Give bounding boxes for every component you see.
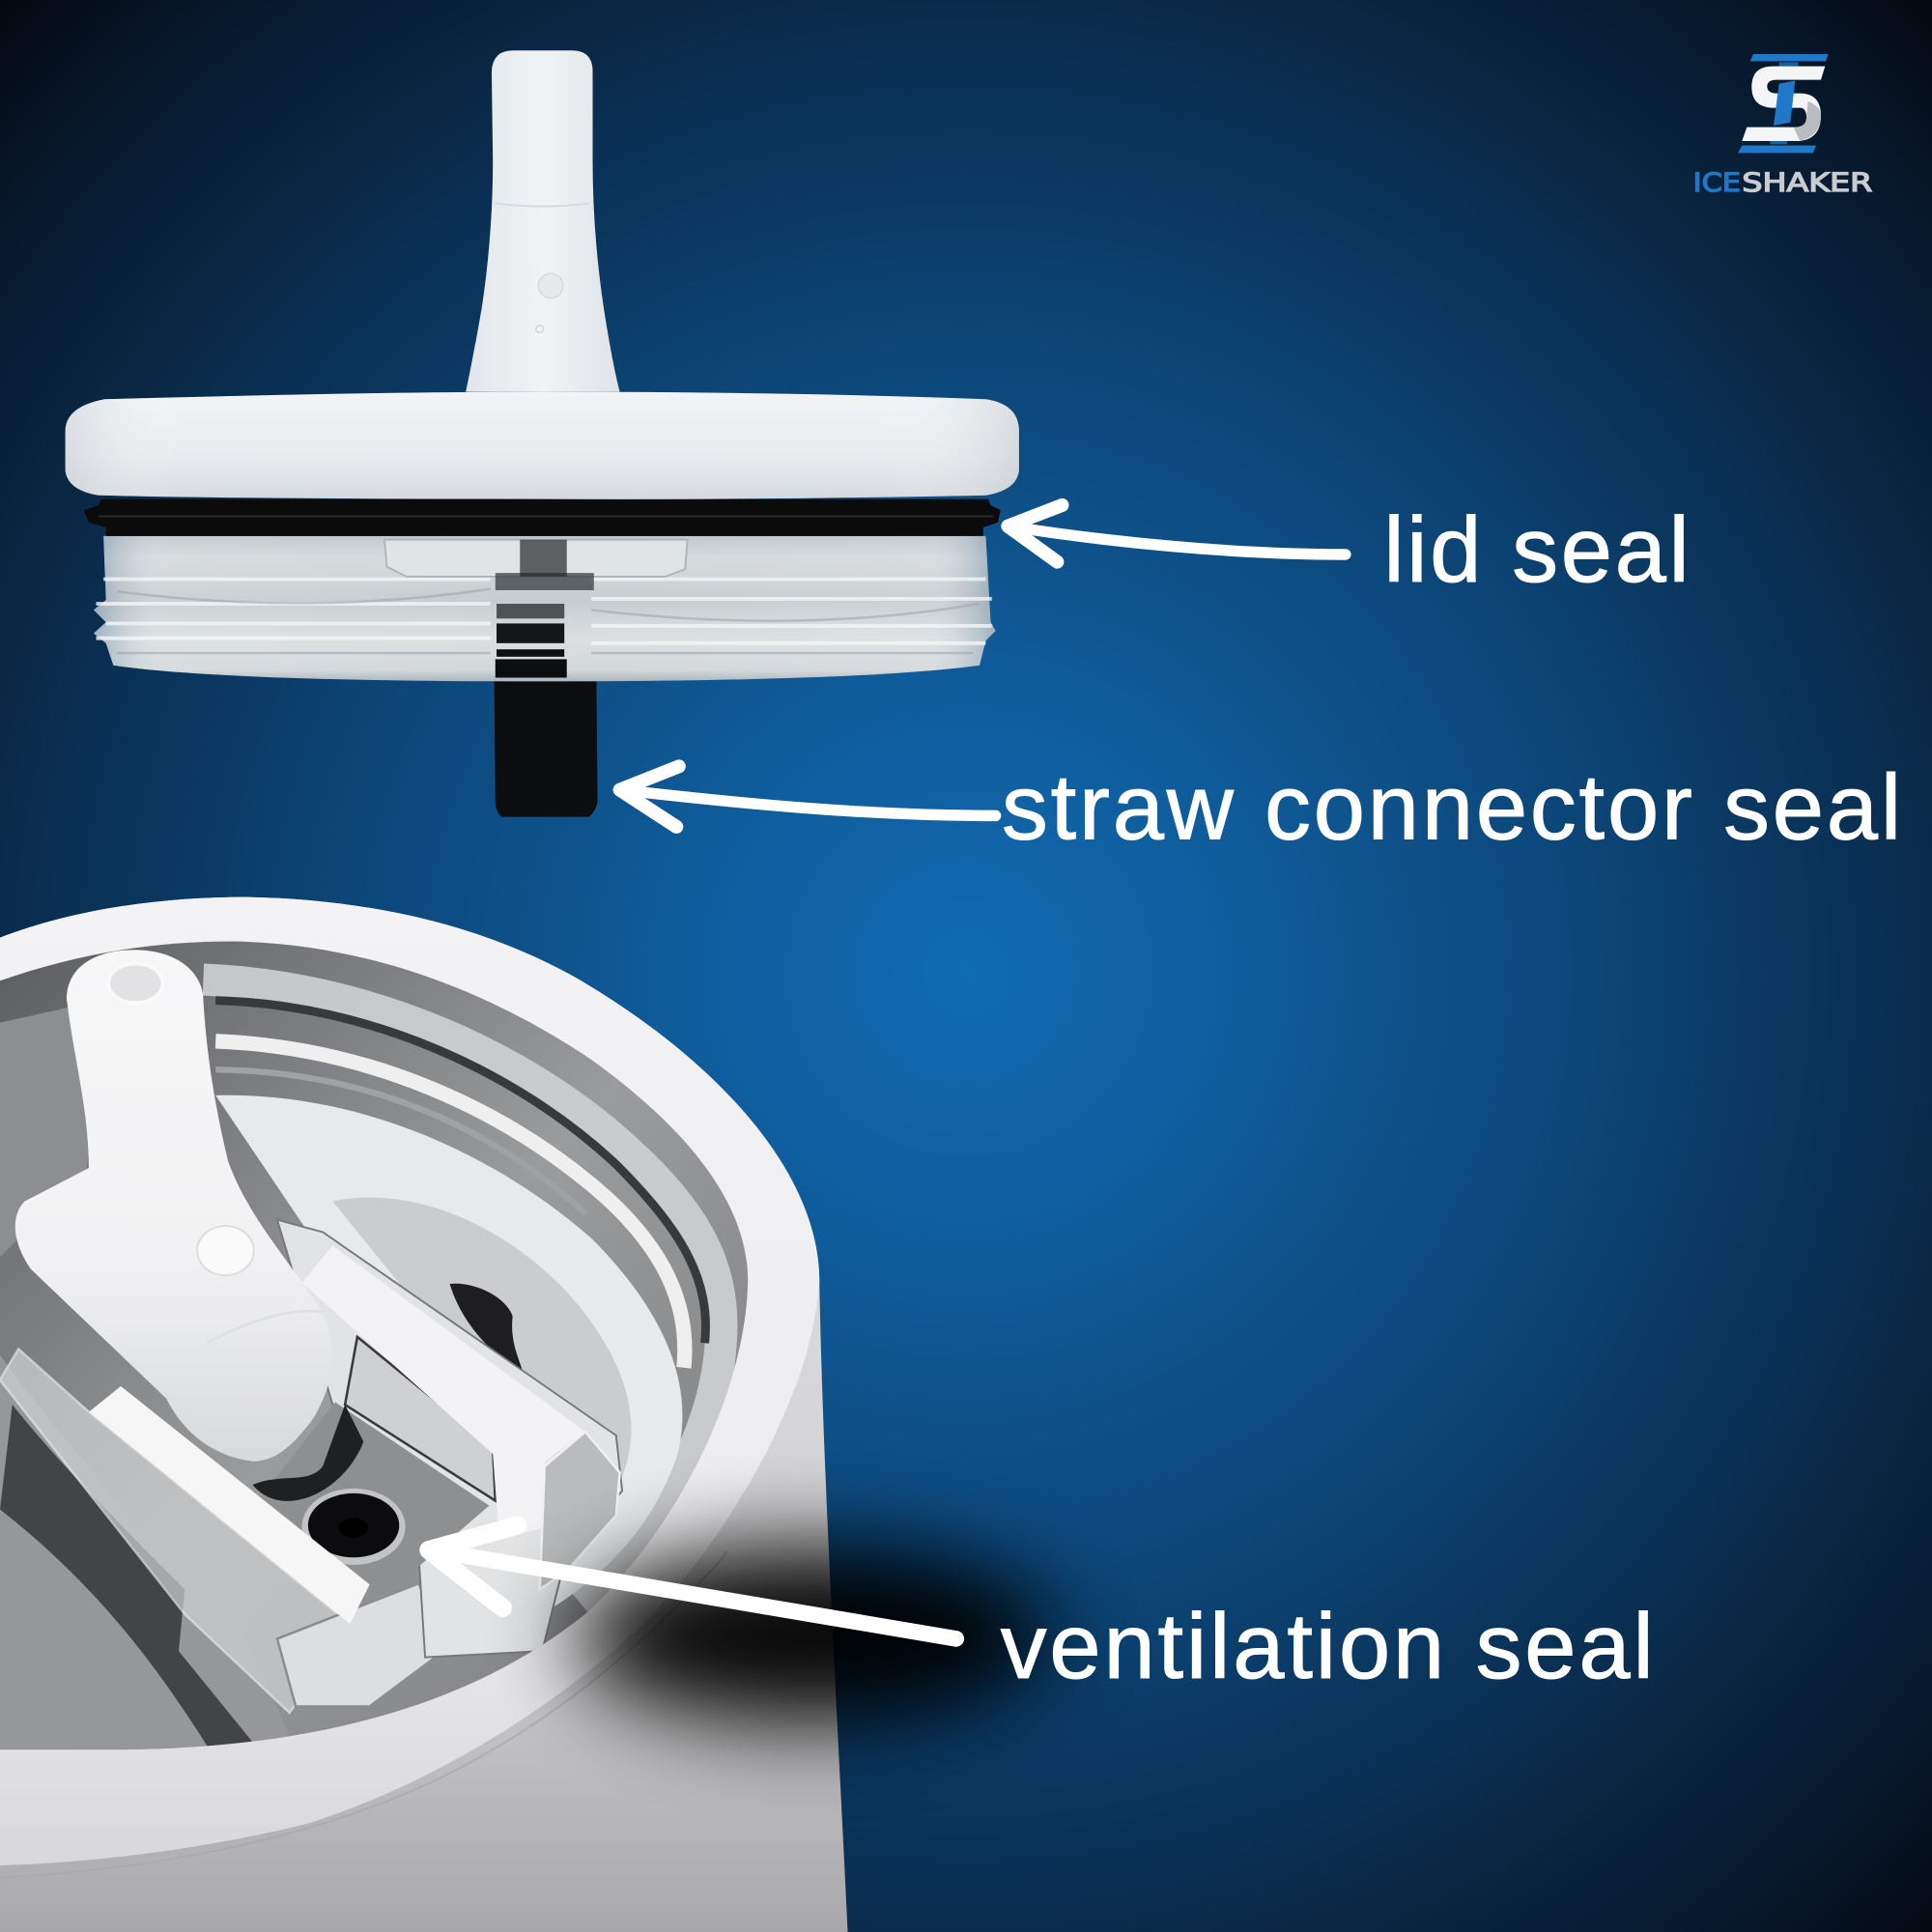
lid disk side shading [66,392,1019,499]
lid seal black ring [84,499,1001,536]
clear tray [0,1350,352,1713]
arrow: lid seal [1008,505,1346,562]
label: ventilation seal: ventilation seal [1001,1595,1654,1698]
logo wordmark ICE: ICE [1693,168,1741,198]
logo mark [1738,54,1829,153]
right white bar [301,1246,585,1538]
arrow: straw connector seal [620,766,996,827]
label: lid seal: lid seal [1383,498,1690,602]
logo wordmark SHAKER: SHAKER [1742,168,1872,198]
tumbler body and rim [0,897,848,1932]
body seam [0,1552,727,1878]
label: straw connector seal: straw connector seal [1002,756,1901,860]
tumbler photo [0,897,848,1932]
opening interior [0,941,748,1749]
logo: IceShaker [1693,54,1872,198]
lower white bar [89,1386,370,1624]
dark oval slit [450,1284,524,1374]
threaded clear lid body [94,536,996,681]
spout [15,950,332,1462]
spout bump [197,1226,254,1275]
lid assembly photo [66,50,1019,817]
right clear corner [540,1432,620,1589]
straw stem [466,50,620,392]
metallic left area [0,1008,89,1257]
clear lid rings [203,980,722,1602]
lid interior details [0,980,722,1749]
arrow: ventilation seal [429,1525,956,1638]
central black connector [496,540,594,678]
shadow behind arrow [573,1548,1054,1725]
ventilation seal [301,1489,406,1565]
rim band [0,897,819,1865]
white lid surface [215,1095,682,1614]
straw connector seal black tube [494,675,598,817]
chrome well [261,1403,489,1567]
white lid disk [66,392,1019,499]
clear block right of well [277,1220,622,1658]
